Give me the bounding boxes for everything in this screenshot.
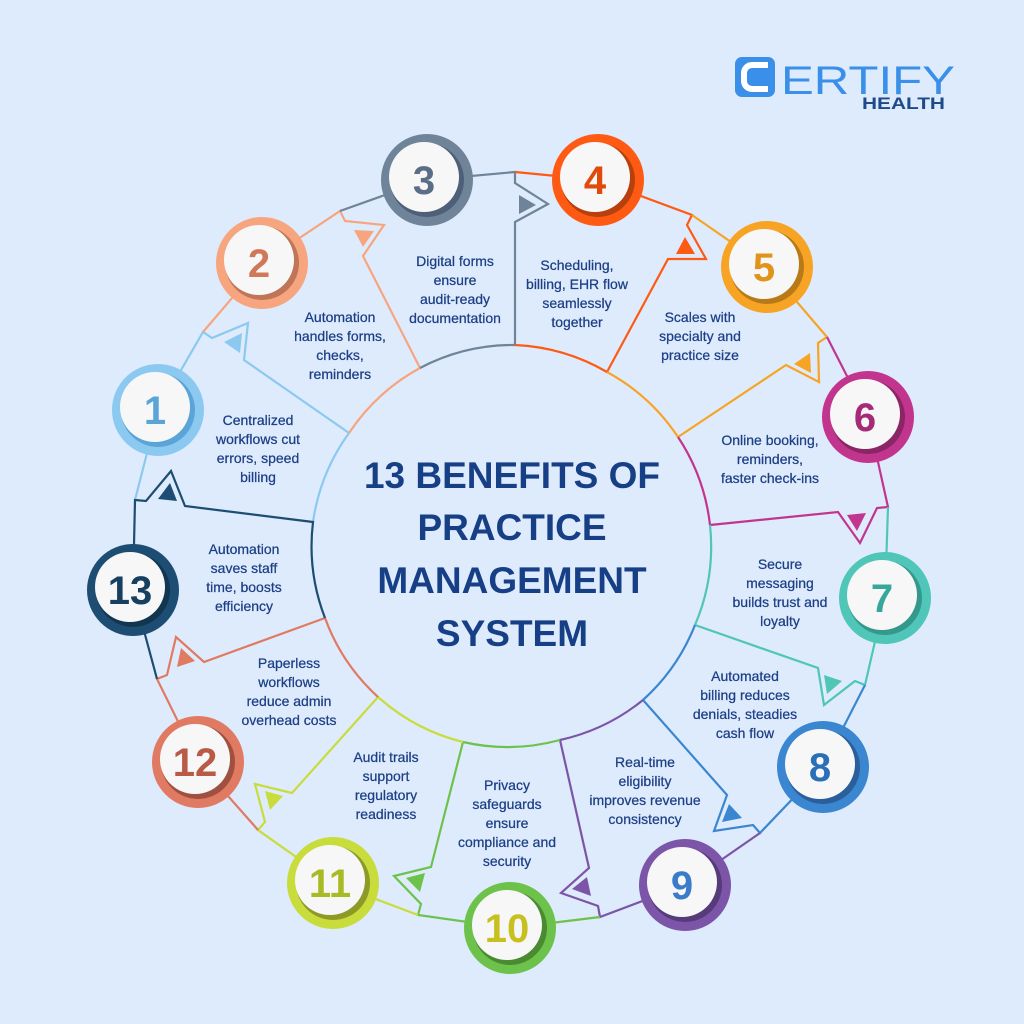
title: PRACTICE [417,507,607,548]
badge 13 [87,544,179,636]
text 6: faster check-ins [721,470,819,486]
cell 5 outline [607,215,827,437]
cell 2 outline [203,211,420,433]
cell 1 outline [135,323,349,522]
text 6: reminders, [737,451,803,467]
cell 8 outline [643,625,865,833]
logo [735,57,955,113]
text 8: billing reduces [700,687,790,703]
text 4: together [551,314,603,330]
text 10: security [483,853,531,869]
badge 10 [464,882,556,974]
cell 12 outline [157,618,378,830]
badge 11 [287,837,379,929]
text 13: time, boosts [206,579,282,595]
text 12: overhead costs [242,712,336,728]
text 4: Scheduling, [540,257,614,273]
cell 3 outline [340,172,548,368]
badge 5 [721,221,813,313]
text 5: Scales with [665,309,735,325]
badge 1: 1 [144,389,166,433]
cell 10 outline [394,740,600,928]
badge 4 [552,134,644,226]
text 13: efficiency [215,598,273,614]
badge 9: 9 [671,864,693,908]
title [364,455,660,654]
badge 2: 2 [248,242,270,286]
badge 8: 8 [809,746,831,790]
cell 7 outline [695,507,888,705]
text 3: ensure [434,272,477,288]
text 9: consistency [608,811,682,827]
text 2: handles forms, [294,328,386,344]
text 7: Secure [758,556,802,572]
text 9: Real-time [615,754,675,770]
text 1: workflows cut [215,431,300,447]
text 2: Automation [305,309,375,325]
cell 4 outline [515,172,706,372]
text 3: documentation [409,310,501,326]
badge 5: 5 [753,246,775,290]
text 11: readiness [356,806,416,822]
text 10: ensure [486,815,529,831]
benefit texts [206,253,827,869]
text 1: billing [240,469,276,485]
text 3: Digital forms [416,253,494,269]
text 13: Automation [209,541,279,557]
text 12: reduce admin [247,693,331,709]
title: MANAGEMENT [377,560,647,601]
text 12: Paperless [258,655,320,671]
badge 6: 6 [854,396,876,440]
text 6: Online booking, [721,432,819,448]
cell 13 outline [133,471,325,679]
text 7: messaging [746,575,814,591]
text 13: saves staff [211,560,277,576]
badge 10: 10 [485,907,529,951]
text 10: compliance and [458,834,556,850]
logo: ERTIFY [781,59,955,103]
text 2: checks, [316,347,364,363]
badge 9 [639,839,731,931]
text 11: Audit trails [353,749,419,765]
text 1: Centralized [223,412,293,428]
badge 11: 11 [309,862,351,906]
text 7: loyalty [760,613,800,629]
badge 6 [822,371,914,463]
text 10: Privacy [484,777,530,793]
text 9: eligibility [619,773,671,789]
text 1: errors, speed [217,450,299,466]
cell 11 outline [255,697,463,915]
arrow markers [158,195,866,896]
badge 1 [112,364,204,456]
badge 7 [839,552,931,644]
text 4: billing, EHR flow [526,276,629,292]
badge 13: 13 [108,569,152,613]
text 12: workflows [257,674,320,690]
text 2: reminders [309,366,371,382]
badge 2 [216,217,308,309]
text 8: cash flow [716,725,775,741]
cell 9 outline [560,700,760,917]
logo: HEALTH [862,94,945,113]
title: SYSTEM [436,613,588,654]
text 9: improves revenue [589,792,701,808]
text 4: seamlessly [542,295,612,311]
badge 8 [777,721,869,813]
badge 4: 4 [584,159,607,203]
number badges [87,134,931,974]
text 7: builds trust and [733,594,827,610]
badge 3 [381,134,473,226]
text 5: practice size [661,347,739,363]
title: 13 BENEFITS OF [364,455,660,496]
badge 3: 3 [413,159,435,203]
diagram ring cells [133,172,888,928]
badge 7: 7 [871,577,893,621]
text 11: regulatory [355,787,417,803]
text 3: audit-ready [420,291,490,307]
text 8: Automated [711,668,779,684]
badge 12 [152,716,244,808]
text 10: safeguards [472,796,542,812]
badge 12: 12 [173,741,217,785]
cell 6 outline [678,337,888,543]
text 5: specialty and [659,328,741,344]
text 8: denials, steadies [693,706,797,722]
text 11: support [363,768,409,784]
